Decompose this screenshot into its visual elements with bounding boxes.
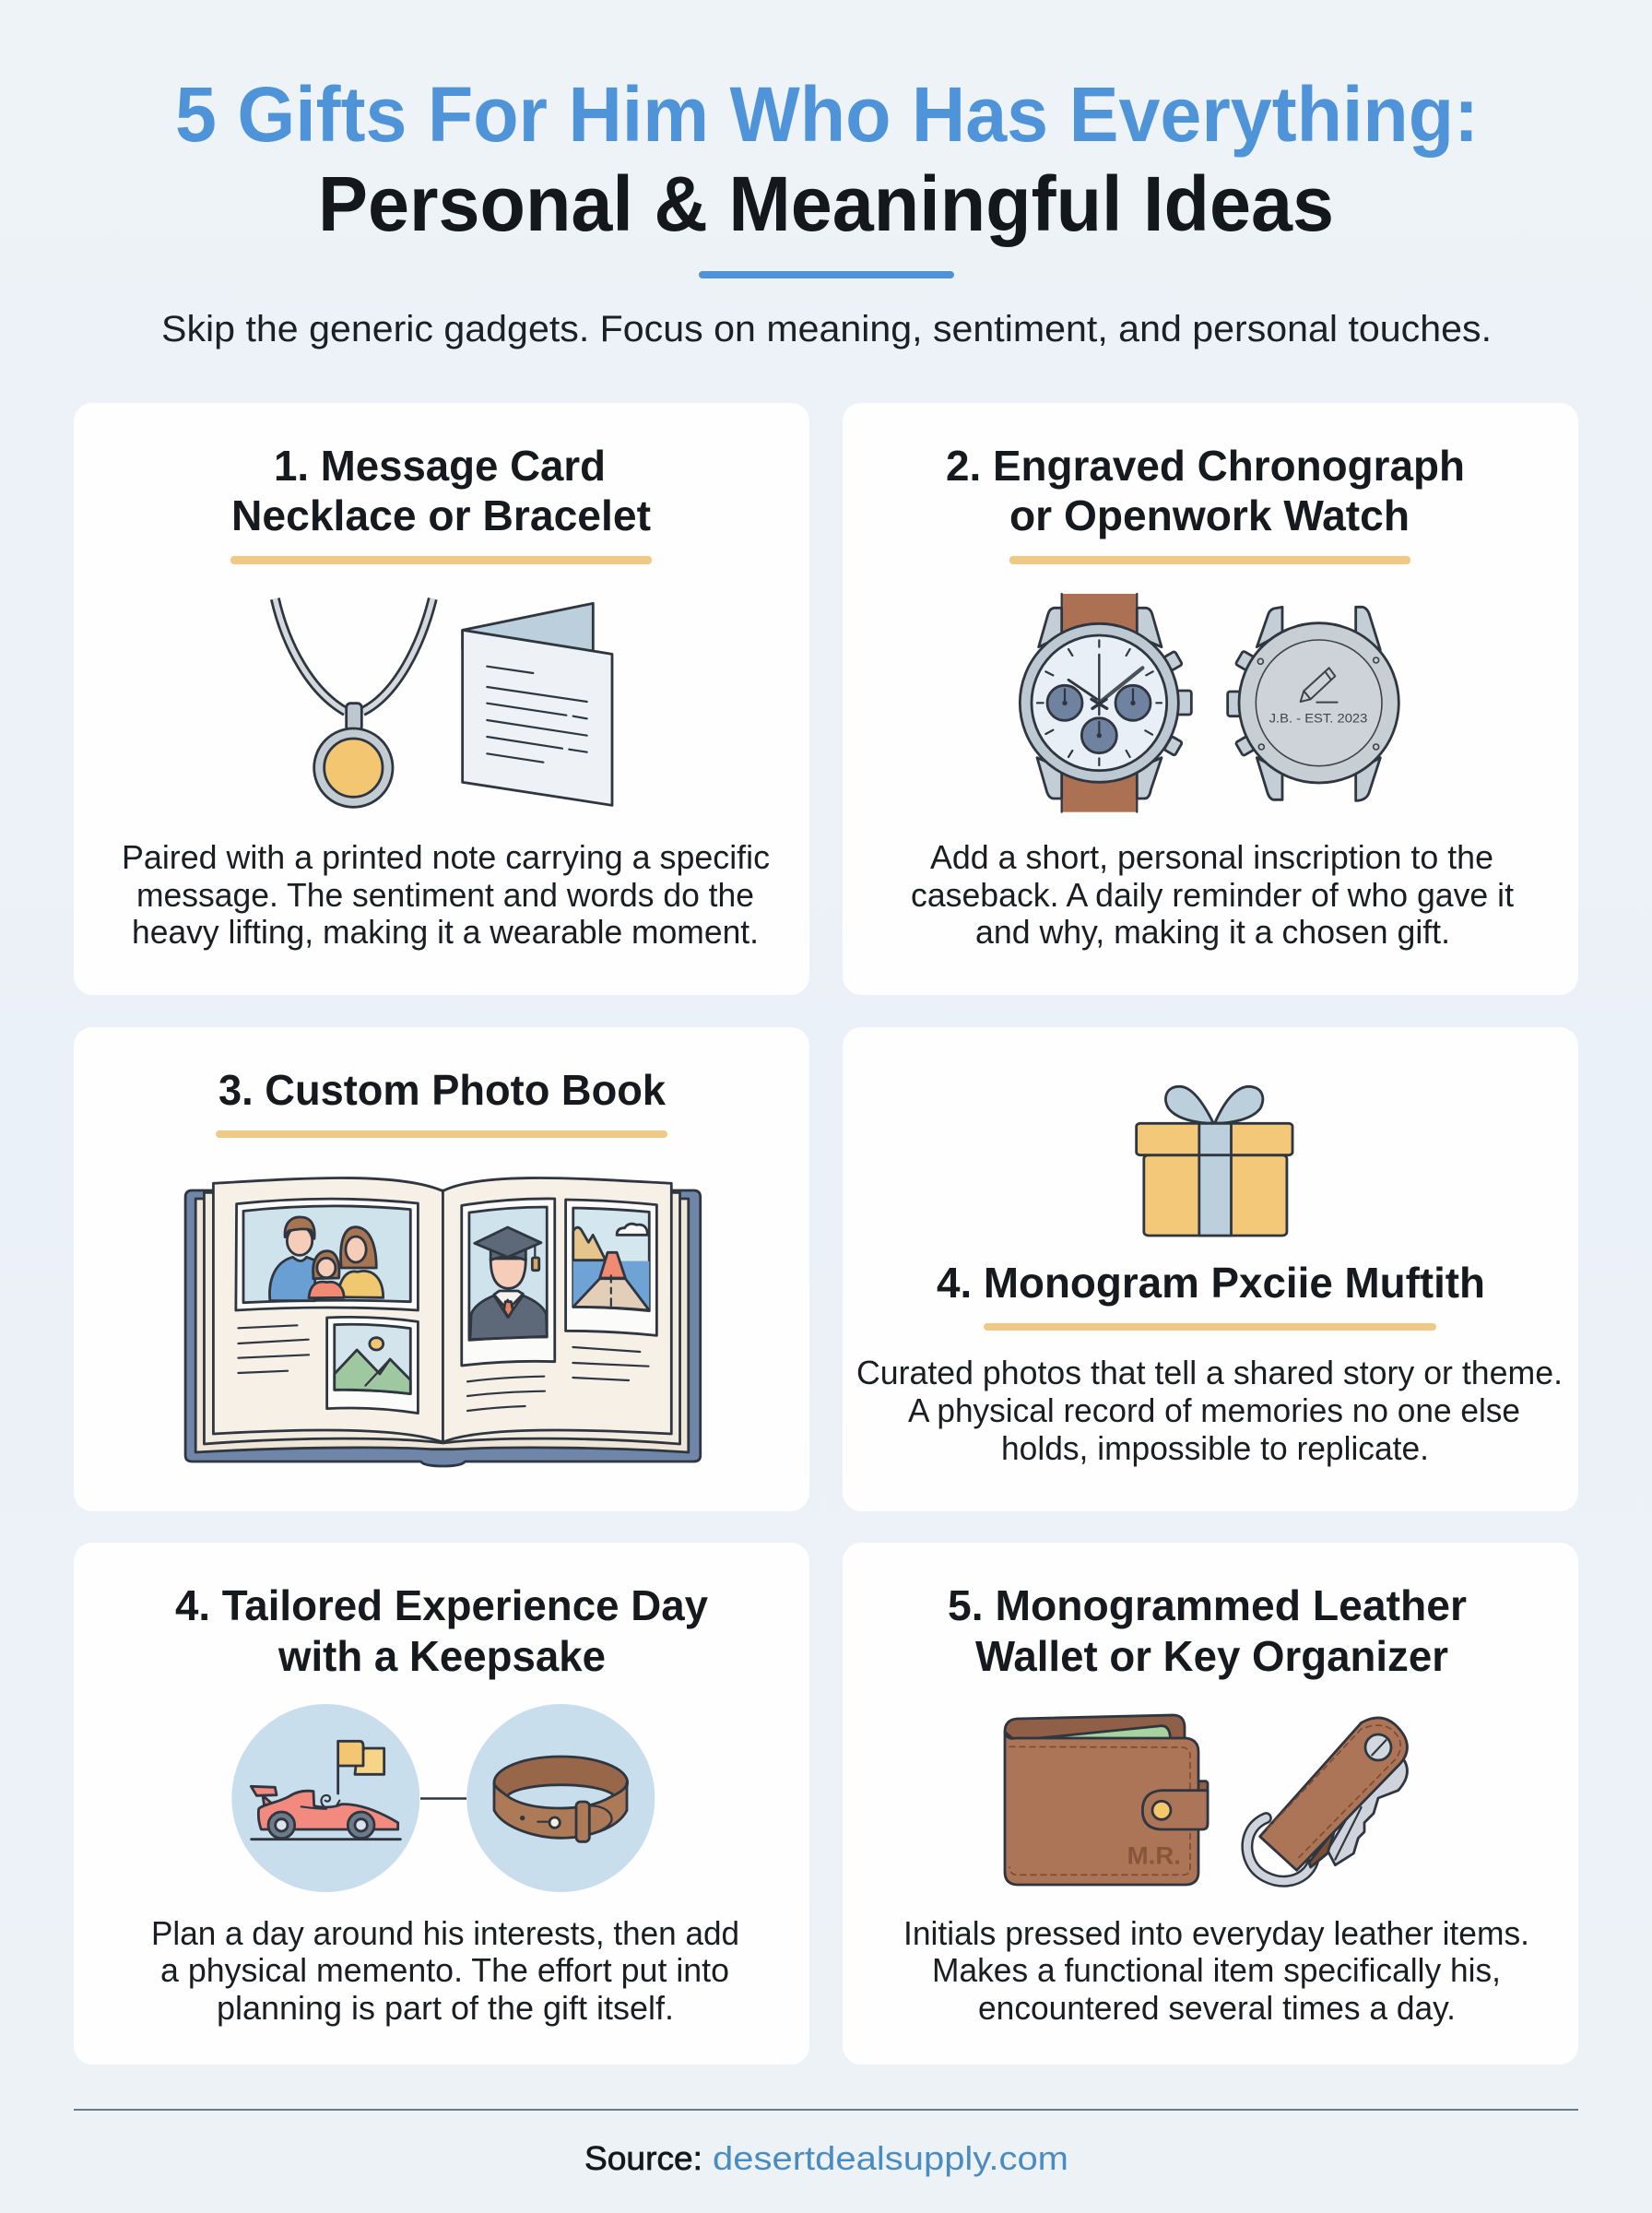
icon: leather keepsake circle [466,1704,655,1892]
card background [843,1027,1578,1511]
heading [948,1581,1467,1680]
heading [175,1581,708,1680]
description [122,838,770,951]
accent rule [1009,556,1410,564]
heading [231,442,651,539]
icon: race car circle [231,1704,419,1892]
photo: family [236,1199,418,1310]
card background [74,403,809,995]
panel: custom photo book [74,1027,809,1511]
description: Initials pressed into everyday leather items. [903,1914,1529,1952]
description [151,1914,739,2027]
heading: Wallet or Key Organizer [975,1632,1448,1680]
panel: message card necklace [74,403,809,995]
card background [74,1027,809,1511]
monogram: M.R. [1127,1842,1181,1870]
accent rule [984,1323,1436,1331]
description: Add a short, personal inscription to the [930,838,1493,876]
heading: 1. Message Card [274,442,606,490]
heading: 3. Custom Photo Book [218,1066,666,1114]
icon: watch caseback [1228,607,1398,800]
description: Curated photos that tell a shared story or theme. [856,1354,1563,1391]
description: message. The sentiment and words do the [136,876,754,914]
description: heavy lifting, making it a wearable moment. [132,913,759,951]
heading: Necklace or Bracelet [231,491,651,539]
icon: wallet [1005,1715,1208,1885]
description: encountered several times a day. [978,1989,1456,2027]
footer [74,2109,1578,2177]
description: holds, impossible to replicate. [1001,1429,1429,1467]
description: Paired with a printed note carrying a specific [122,838,770,876]
accent rule [216,1130,667,1138]
accent rule [230,556,652,564]
description: caseback. A daily reminder of who gave it [911,876,1514,914]
icon: necklace [275,598,432,807]
heading: 5. Monogrammed Leather [948,1581,1467,1629]
description [856,1354,1563,1467]
heading: 2. Engraved Chronograph [946,442,1465,490]
captions left [238,1325,309,1373]
source link: desertdealsupply.com [713,2139,1068,2177]
title line 2: Personal & Meaningful Ideas [318,160,1334,247]
header [161,71,1492,349]
description [903,1914,1529,2027]
panel: tailored experience day [74,1543,809,2065]
icon: gift box [1137,1086,1292,1236]
card background [843,403,1578,995]
description: A physical record of memories no one else [908,1391,1520,1429]
description: planning is part of the gift itself. [217,1989,674,2027]
photo: graduate [462,1199,555,1366]
icon: open photo book [185,1178,701,1466]
icon: key organizer [1247,1718,1407,1881]
description: Makes a functional item specifically his, [932,1951,1501,1989]
panel: monogram photo book description [843,1027,1578,1511]
panel: engraved watch [843,403,1578,995]
subtitle: Skip the generic gadgets. Focus on meaning, sentiment, and personal touches. [161,309,1492,349]
engraving text: J.B. - EST. 2023 [1269,710,1368,725]
heading: or Openwork Watch [1009,491,1410,539]
heading [946,442,1465,539]
title rule [699,271,954,278]
description: a physical memento. The effort put into [160,1951,729,1989]
description: Plan a day around his interests, then add [151,1914,739,1952]
icon: folded message card [463,603,612,805]
title line 1: 5 Gifts For Him Who Has Everything: [175,71,1479,158]
connector line [420,1797,466,1800]
description [911,838,1514,951]
heading: with a Keepsake [277,1632,606,1680]
card background [843,1543,1578,2065]
card background [74,1543,809,2065]
heading: 4. Monogram Pxciie Muftith [937,1259,1485,1307]
footer divider [74,2109,1578,2111]
photo: coastal road [566,1200,656,1335]
photo: mountains [327,1317,418,1414]
heading: 4. Tailored Experience Day [175,1581,708,1629]
captions right [467,1347,649,1411]
source label: Source: [584,2139,702,2177]
description: and why, making it a chosen gift. [975,913,1450,951]
icon: watch front [1020,594,1191,812]
panel: monogrammed leather wallet [843,1543,1578,2065]
